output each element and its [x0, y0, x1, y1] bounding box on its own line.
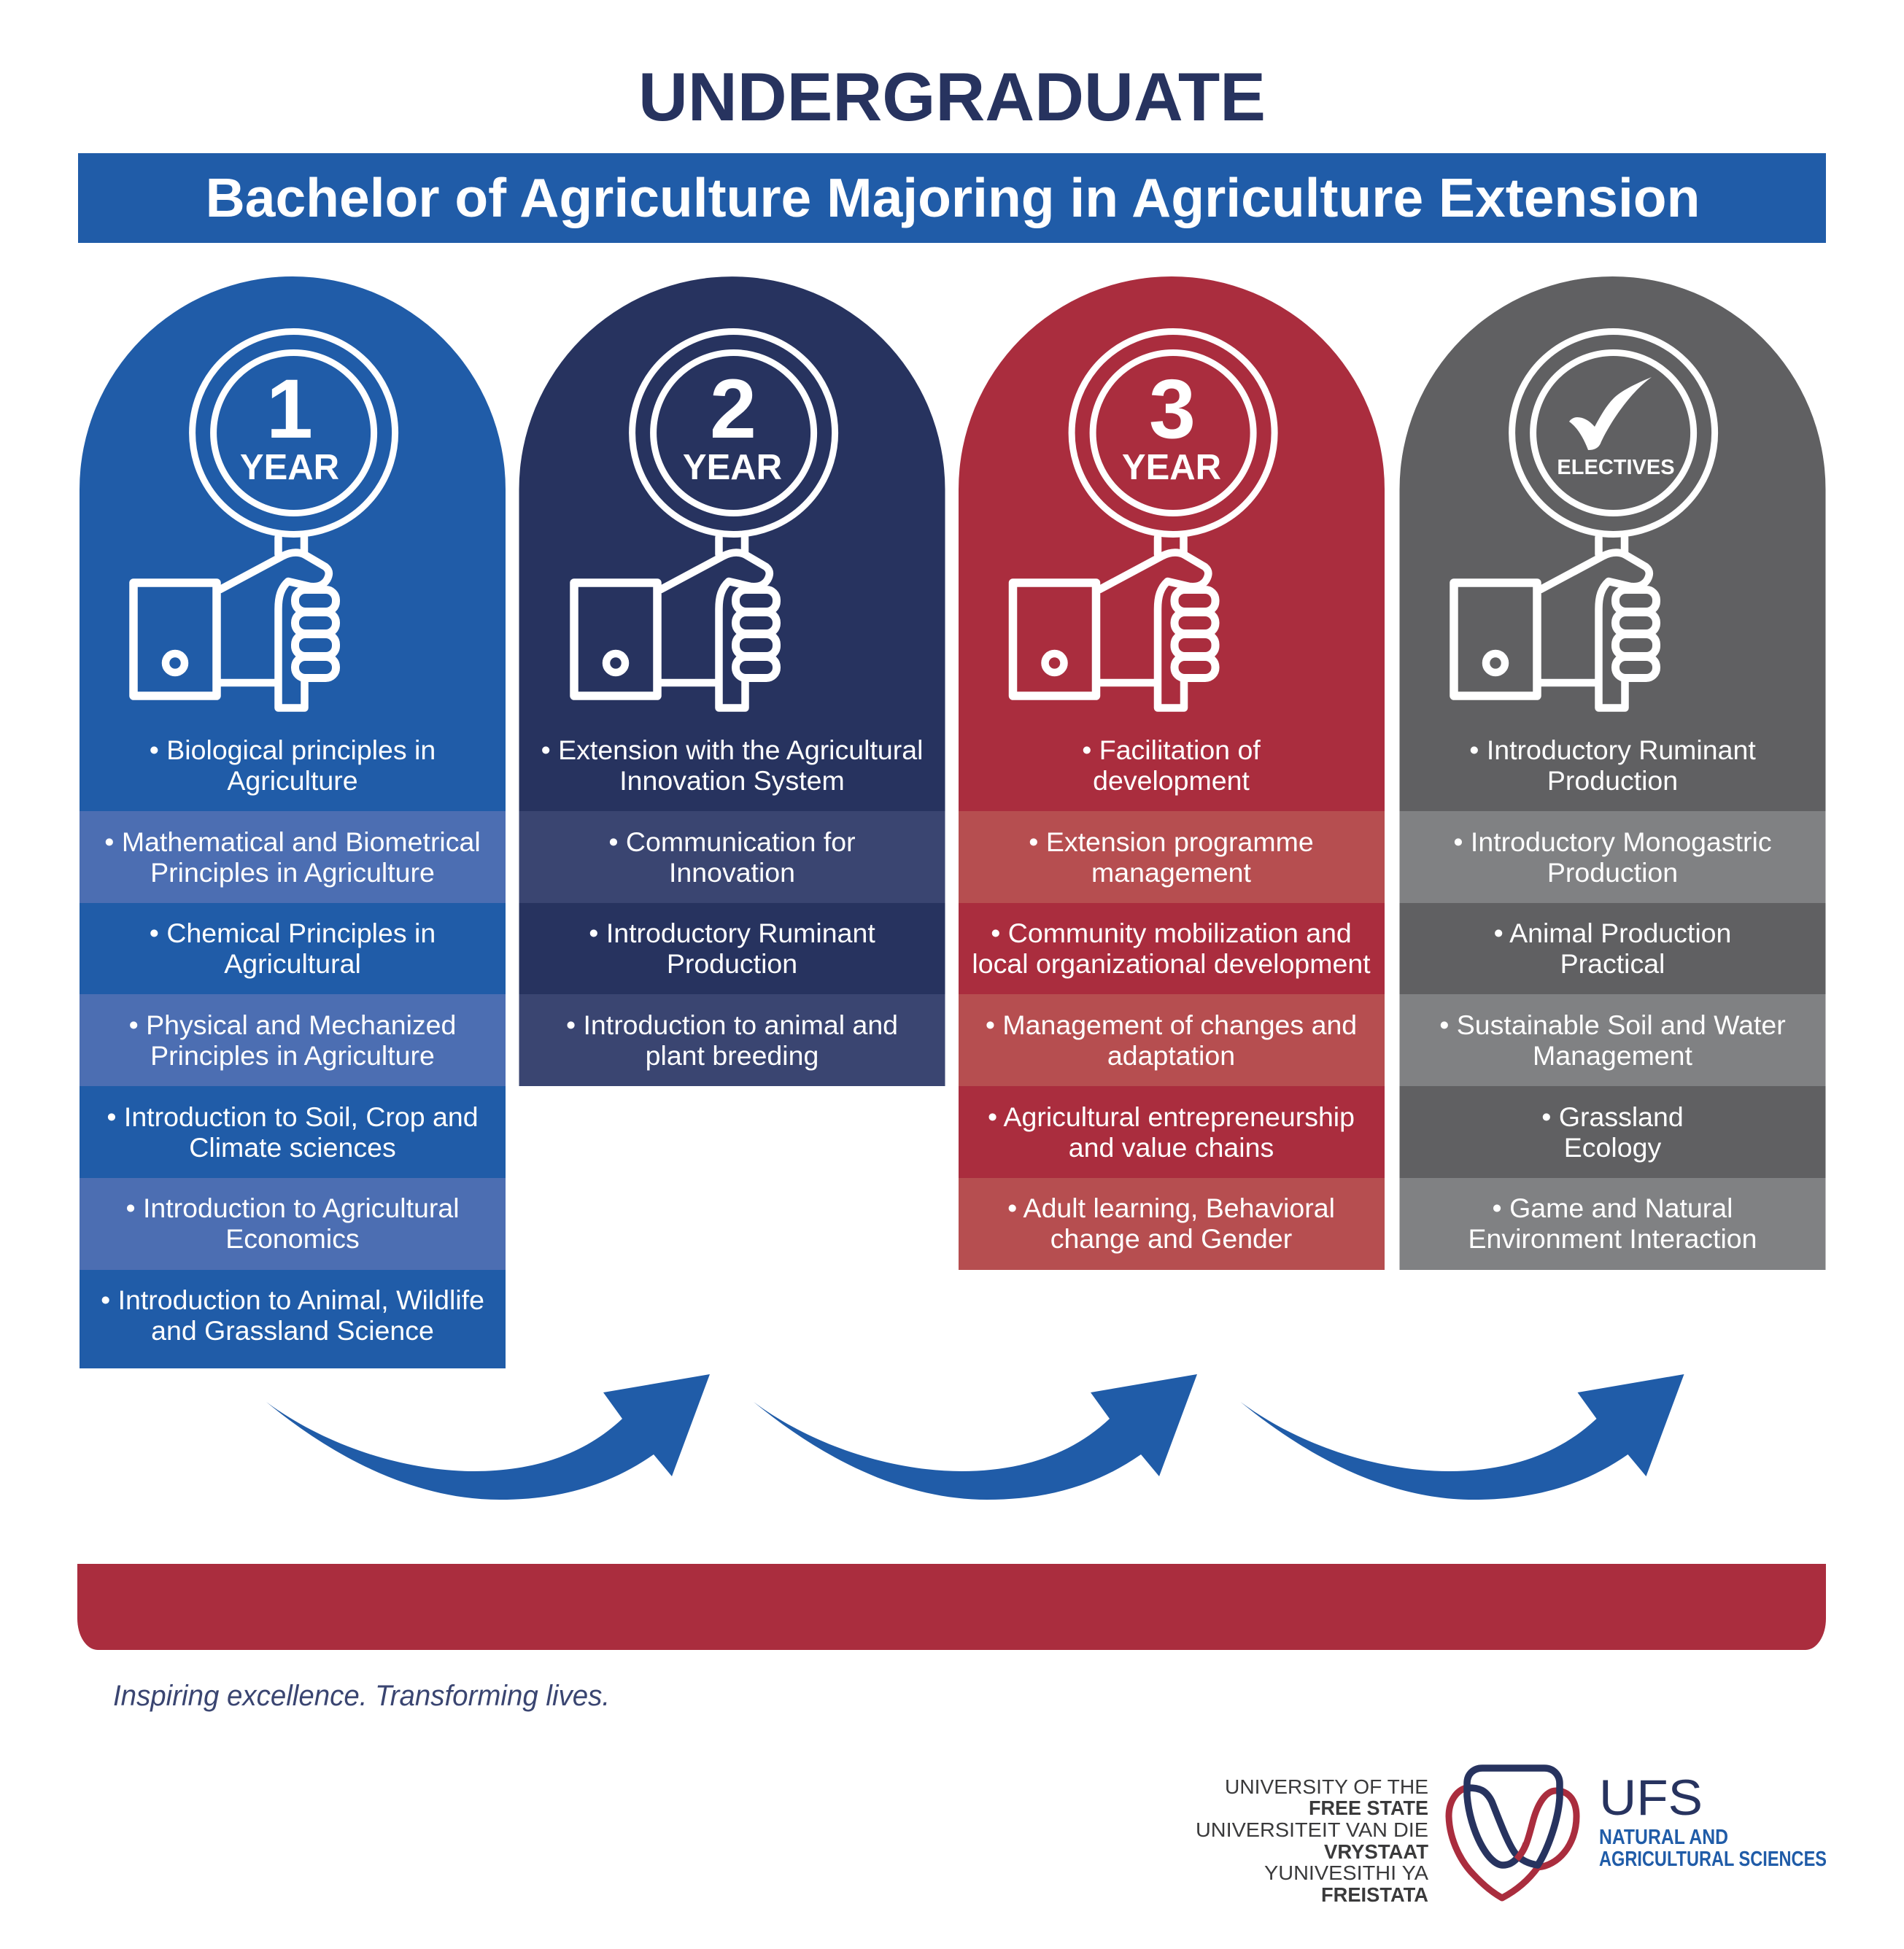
course 3: • Introductory Ruminant	[589, 918, 875, 948]
arch header	[1399, 276, 1825, 811]
course 4: • Management of changes and	[986, 1010, 1357, 1040]
course 2	[80, 811, 506, 903]
course 1: • Introductory Ruminant	[1469, 735, 1756, 765]
course 1: • Facilitation of	[1082, 735, 1261, 765]
logo: university name	[1196, 1775, 1428, 1906]
course 7: • Introduction to Animal, Wildlife	[101, 1285, 484, 1315]
panel: year 3	[959, 276, 1385, 1270]
panel: year 1	[80, 276, 506, 1368]
course 4: adaptation	[1107, 1040, 1235, 1071]
course 1: Innovation System	[619, 765, 845, 796]
tagline: Inspiring excellence. Transforming lives.	[113, 1680, 610, 1712]
course 5: Ecology	[1564, 1132, 1661, 1163]
course 6: • Game and Natural	[1493, 1193, 1733, 1223]
panel: year 2	[519, 276, 945, 1086]
course 1: Production	[1547, 765, 1678, 796]
course 3: • Community mobilization and	[991, 918, 1352, 948]
course 3	[959, 903, 1385, 994]
course 5: Climate sciences	[189, 1132, 396, 1163]
course 3	[1399, 903, 1825, 994]
course 5: and value chains	[1069, 1132, 1274, 1163]
course 4: • Sustainable Soil and Water	[1439, 1010, 1786, 1040]
course 6: change and Gender	[1050, 1223, 1292, 1254]
icon: magnifier lens	[193, 331, 395, 534]
icon: hand	[133, 538, 336, 708]
course 2: management	[1091, 857, 1252, 888]
course 2	[959, 811, 1385, 903]
course 2: Principles in Agriculture	[150, 857, 435, 888]
year number: 2	[710, 363, 756, 456]
logo: university name: UNIVERSITEIT VAN DIE	[1196, 1818, 1428, 1841]
icon: check mark	[1569, 377, 1652, 450]
icon: magnifier lens	[1512, 331, 1715, 534]
course 2: • Introductory Monogastric	[1453, 826, 1772, 857]
course 4: Principles in Agriculture	[150, 1040, 435, 1071]
arrow 1	[266, 1374, 710, 1500]
banner	[78, 153, 1826, 243]
electives label: ELECTIVES	[1557, 456, 1675, 479]
course 2: Innovation	[669, 857, 795, 888]
arrow 2	[754, 1374, 1197, 1500]
course 5	[80, 1086, 506, 1178]
logo: university name: FREE STATE	[1309, 1797, 1428, 1819]
course 2: • Communication for	[608, 826, 856, 857]
course 2: • Mathematical and Biometrical	[104, 826, 481, 857]
year label: YEAR	[1122, 448, 1221, 487]
arch header	[80, 276, 506, 811]
arrow 3	[1240, 1374, 1684, 1500]
logo: university name: VRYSTAAT	[1324, 1840, 1428, 1863]
course 3: local organizational development	[972, 948, 1371, 979]
course 5: • Agricultural entrepreneurship	[988, 1101, 1355, 1132]
course 4	[1399, 994, 1825, 1086]
course 4: • Physical and Mechanized	[129, 1010, 456, 1040]
course 2	[1399, 811, 1825, 903]
logo: emblem	[1449, 1768, 1576, 1898]
course 3	[519, 903, 945, 994]
course 4	[80, 994, 506, 1086]
year label: YEAR	[240, 448, 339, 487]
course 3: • Chemical Principles in	[150, 918, 436, 948]
course 4	[959, 994, 1385, 1086]
logo: faculty name: NATURAL AND	[1599, 1826, 1728, 1849]
year number: 1	[266, 363, 313, 456]
course 3: Production	[667, 948, 797, 979]
course 1: • Extension with the Agricultural	[541, 735, 923, 765]
course 1: development	[1093, 765, 1250, 796]
course 7: and Grassland Science	[151, 1315, 434, 1346]
course 5: • Grassland	[1541, 1101, 1684, 1132]
course 2: Production	[1547, 857, 1678, 888]
arch header	[959, 276, 1385, 811]
panel: electives	[1399, 276, 1825, 1270]
course 3: Practical	[1560, 948, 1665, 979]
course 2: • Extension programme	[1029, 826, 1314, 857]
course 5	[1399, 1086, 1825, 1178]
course 3	[80, 903, 506, 994]
logo: university name: UNIVERSITY OF THE	[1225, 1775, 1428, 1798]
course 3: Agricultural	[224, 948, 361, 979]
logo: university name: FREISTATA	[1321, 1883, 1428, 1906]
footer bar	[77, 1564, 1826, 1650]
icon: hand	[1454, 538, 1656, 708]
course 4	[519, 994, 945, 1086]
course 3: • Animal Production	[1494, 918, 1731, 948]
course 6: • Introduction to Agricultural	[125, 1193, 460, 1223]
logo: UFS wordmark: UFS	[1599, 1770, 1703, 1826]
logo: university name: YUNIVESITHI YA	[1264, 1861, 1428, 1884]
year number: 3	[1149, 363, 1196, 456]
course 6	[959, 1178, 1385, 1270]
course 6	[80, 1178, 506, 1270]
course 6: Economics	[225, 1223, 360, 1254]
course 4: plant breeding	[646, 1040, 819, 1071]
title: UNDERGRADUATE	[638, 58, 1266, 135]
course 6	[1399, 1178, 1825, 1270]
course 4: Management	[1533, 1040, 1693, 1071]
icon: hand	[574, 538, 776, 708]
arch header	[519, 276, 945, 811]
course 5	[959, 1086, 1385, 1178]
logo: faculty name: AGRICULTURAL SCIENCES	[1599, 1848, 1827, 1871]
icon: hand	[1013, 538, 1215, 708]
course 1: • Biological principles in	[150, 735, 436, 765]
course 5: • Introduction to Soil, Crop and	[107, 1101, 479, 1132]
course 4: • Introduction to animal and	[566, 1010, 898, 1040]
course 7	[80, 1270, 506, 1368]
icon: magnifier lens	[632, 331, 835, 534]
course 6: • Adult learning, Behavioral	[1007, 1193, 1335, 1223]
course 6: Environment Interaction	[1468, 1223, 1757, 1254]
year label: YEAR	[683, 448, 782, 487]
course 1: Agriculture	[227, 765, 358, 796]
icon: magnifier lens	[1072, 331, 1274, 534]
logo: faculty name	[1599, 1826, 1827, 1871]
course 2	[519, 811, 945, 903]
banner heading: Bachelor of Agriculture Majoring in Agriculture Extension	[206, 167, 1700, 228]
